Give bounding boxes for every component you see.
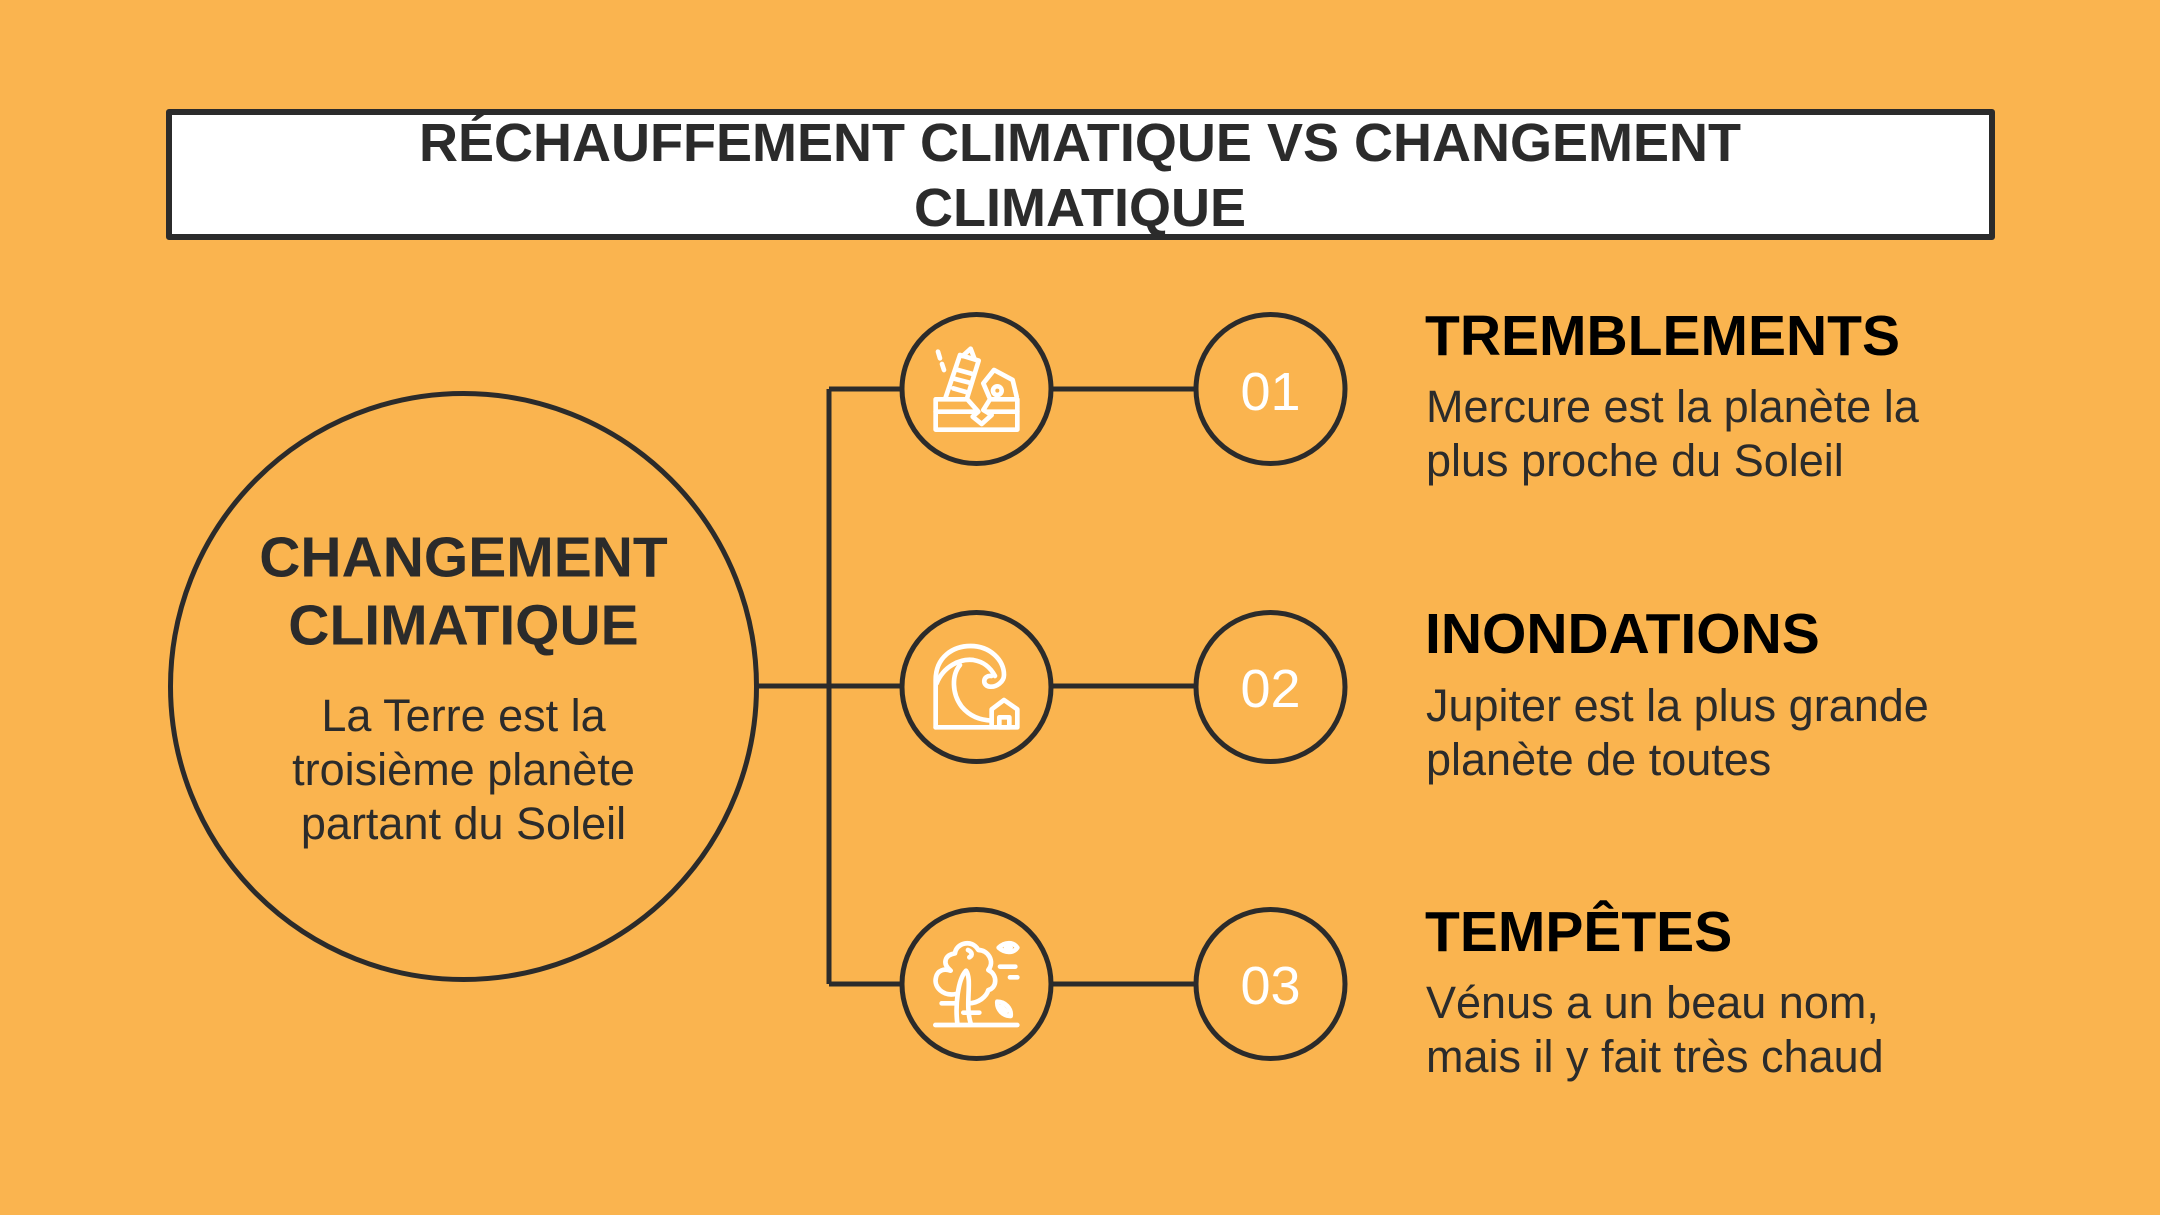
item 03 number bbox=[1196, 910, 1345, 1058]
icon: earthquake bbox=[902, 314, 1051, 464]
text block: inondations bbox=[1425, 602, 1929, 785]
text block: tempetes: Vénus a un beau nom, bbox=[1426, 977, 1879, 1028]
item 02 number bbox=[1196, 612, 1345, 762]
text block: tremblements bbox=[1425, 304, 1920, 486]
main description: La Terre est la bbox=[321, 690, 607, 741]
text block: inondations: Jupiter est la plus grande bbox=[1426, 680, 1929, 731]
text block: tempetes: TEMPÊTES bbox=[1425, 899, 1732, 964]
main heading: CLIMATIQUE bbox=[288, 594, 639, 658]
main description: partant du Soleil bbox=[301, 798, 626, 849]
item 01 number bbox=[1196, 314, 1345, 464]
item 01 number: 01 bbox=[1240, 362, 1301, 422]
text block: tremblements: Mercure est la planète la bbox=[1426, 381, 1920, 432]
icon: storm tree bbox=[902, 910, 1051, 1058]
text block: inondations: planète de toutes bbox=[1426, 734, 1771, 785]
connector lines bbox=[757, 389, 1196, 984]
text block: tremblements: plus proche du Soleil bbox=[1426, 435, 1844, 486]
text block: tremblements: TREMBLEMENTS bbox=[1425, 304, 1900, 368]
text block: tempetes: mais il y fait très chaud bbox=[1426, 1031, 1884, 1082]
item 03 number: 03 bbox=[1240, 956, 1301, 1016]
item 02 number: 02 bbox=[1240, 659, 1301, 719]
panel: main circle bbox=[170, 394, 756, 980]
title text: CLIMATIQUE bbox=[914, 178, 1246, 238]
main heading: CHANGEMENT bbox=[259, 526, 668, 590]
title text: RÉCHAUFFEMENT CLIMATIQUE VS CHANGEMENT bbox=[419, 113, 1741, 173]
main description: troisième planète bbox=[292, 744, 635, 795]
icon: flood wave bbox=[902, 612, 1051, 762]
text block: tempetes bbox=[1425, 899, 1884, 1082]
text block: inondations: INONDATIONS bbox=[1425, 602, 1820, 666]
title banner bbox=[169, 112, 1992, 238]
